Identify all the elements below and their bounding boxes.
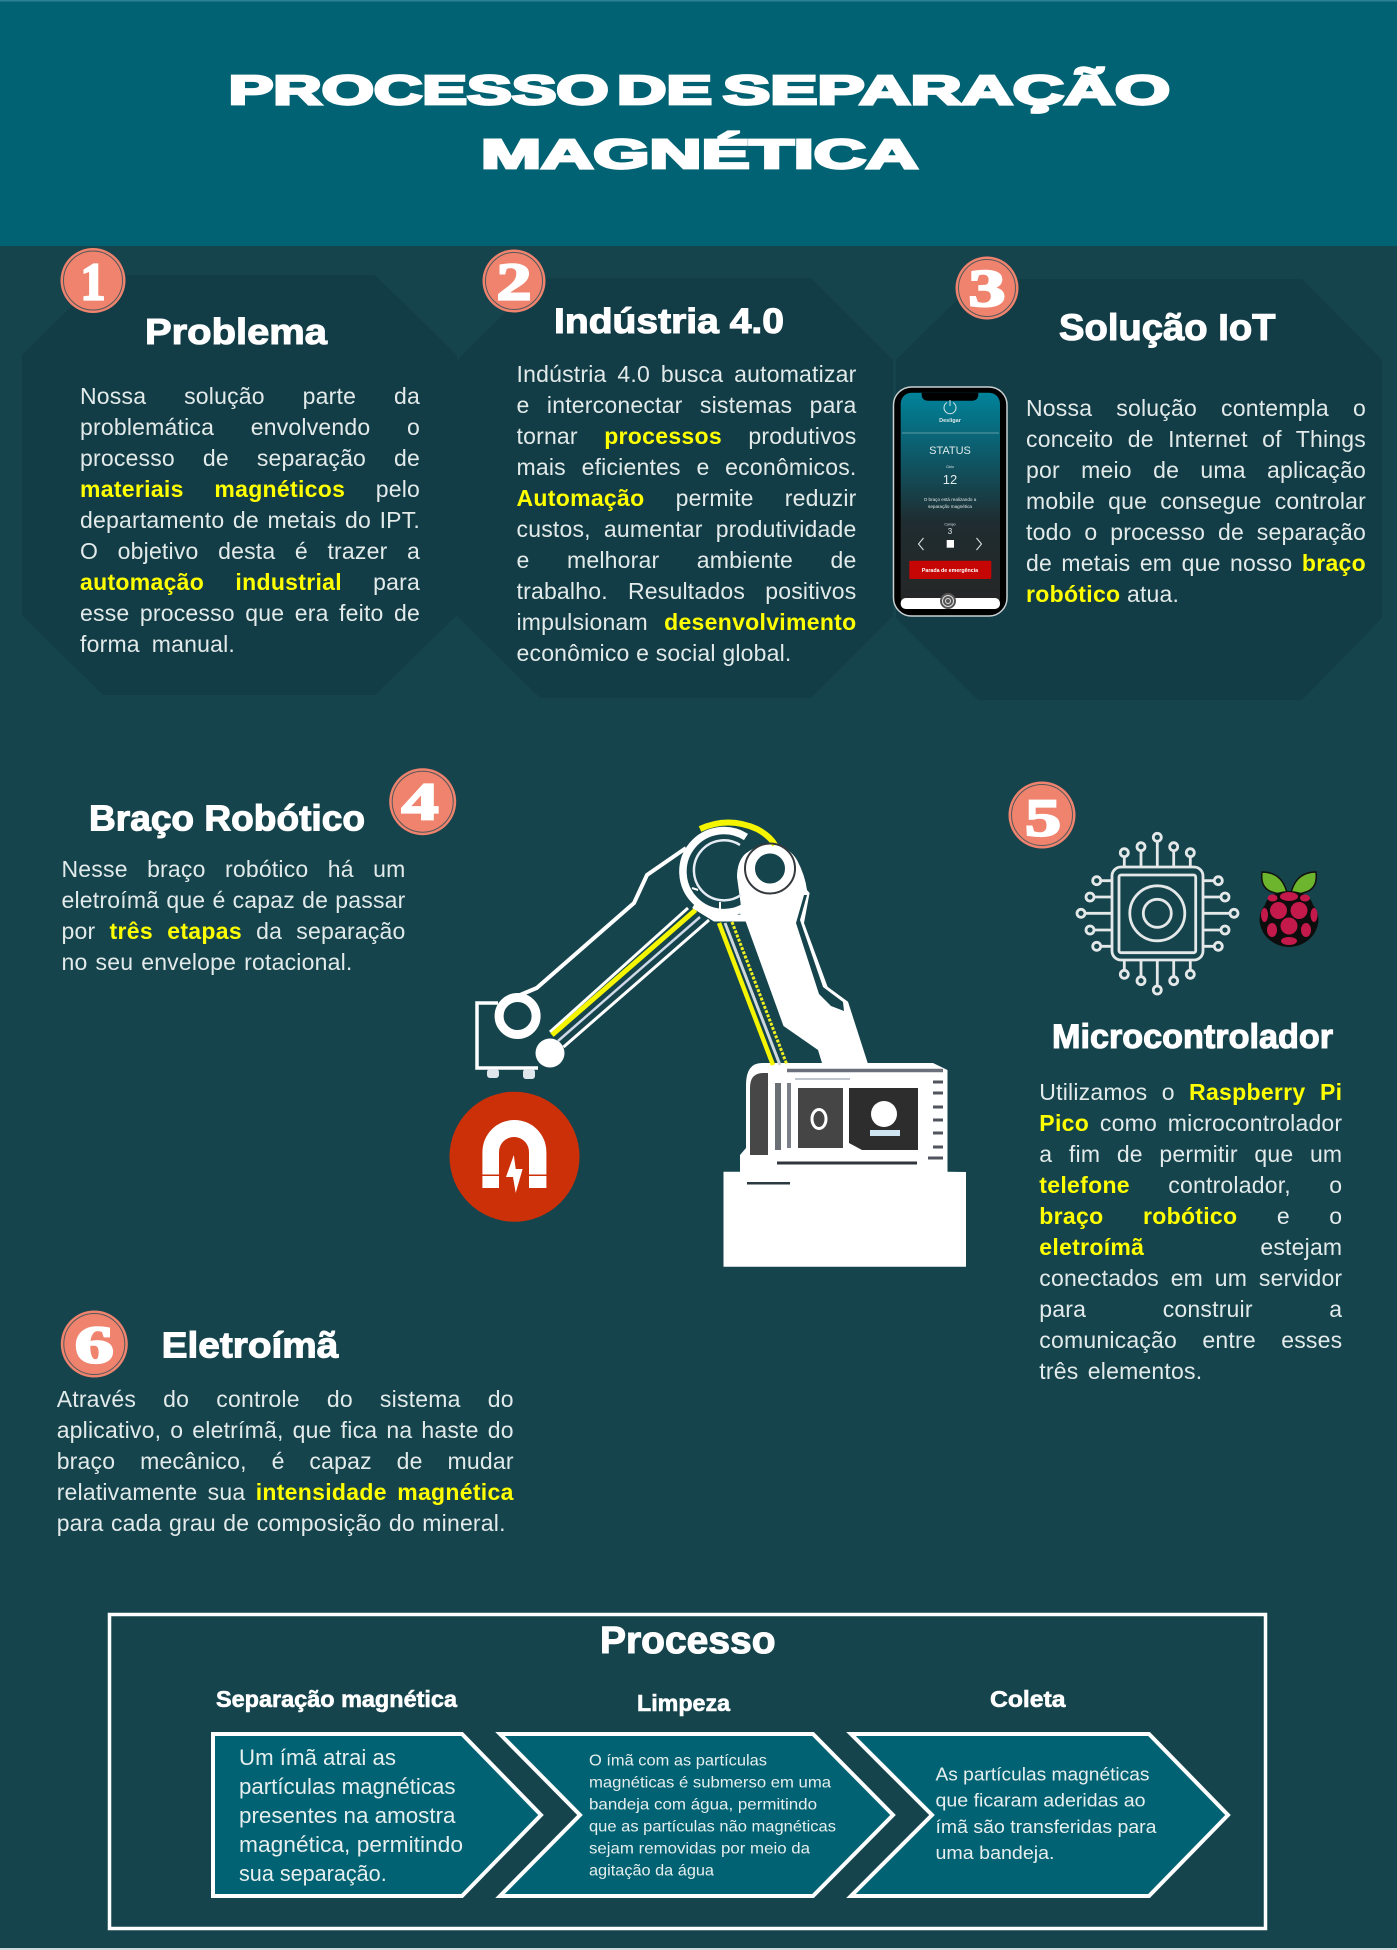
text: braco robotico: eletroímã que é capaz de passar [62, 887, 406, 913]
text: industria 4.0: trabalho. Resultados positivos [516, 578, 856, 604]
chevron step 3 [851, 1734, 1228, 1896]
panel: industria 4.0 [457, 250, 893, 698]
panel: microcontrolador [1008, 782, 1342, 1387]
icon: raspberry pi [1260, 872, 1318, 947]
icon: smartphone app: 3 [948, 527, 953, 536]
text: problema: materiais magnéticos pelo [80, 476, 420, 502]
text: solucao IoT: mobile que consegue controlar [1026, 488, 1366, 514]
chevron step 3: As partículas magnéticas [936, 1764, 1150, 1784]
text: solucao IoT: Nossa solução contempla o [1026, 395, 1366, 421]
text: problema: Nossa solução parte da [80, 383, 420, 409]
badge 6: 6 [75, 1316, 114, 1374]
text: microcontrolador: Pico como microcontrolador [1039, 1110, 1342, 1136]
step heading: coleta: Coleta [990, 1686, 1066, 1712]
chevron step 1: partículas magnéticas [239, 1774, 456, 1799]
panel: eletroima [57, 1310, 514, 1539]
icon: smartphone app: separação magnética [928, 504, 972, 509]
title: MAGNÉTICA [481, 131, 918, 177]
text: industria 4.0: econômico e social global. [516, 640, 792, 666]
badge 3 [956, 256, 1018, 320]
text: microcontrolador: telefone controlador, o [1039, 1172, 1342, 1198]
octagon background 1 [22, 275, 457, 695]
heading: Braco Robotico: Braço Robótico [89, 798, 365, 838]
heading: Eletroima: Eletroímã [162, 1325, 339, 1366]
text: industria 4.0 [516, 358, 856, 668]
robot elbow ring [683, 822, 775, 918]
octagon background 3 [896, 279, 1382, 700]
heading: Industria 4.0: Indústria 4.0 [554, 302, 784, 341]
step heading: limpeza: Limpeza [637, 1690, 730, 1716]
title: SEPARAÇÃO [723, 67, 1170, 113]
badge 2 [482, 250, 546, 312]
badge 4: 4 [402, 774, 438, 832]
robot base block [724, 1172, 966, 1267]
text: microcontrolador: comunicação entre esses [1039, 1327, 1342, 1353]
text: industria 4.0: Automação permite reduzir [516, 484, 856, 510]
text: eletroima: aplicativo, o eletrímã, que fica na haste do [57, 1417, 514, 1443]
chevron step 2 [500, 1734, 893, 1896]
icon: smartphone app: STATUS [929, 445, 971, 457]
panel: braco robotico [62, 768, 456, 978]
chevron step 1: magnética, permitindo [239, 1832, 463, 1857]
text: microcontrolador: para construir a [1039, 1296, 1342, 1322]
badge 4 [389, 768, 456, 835]
robot upper arm outline [520, 848, 686, 995]
text: eletroima: relativamente sua intensidade magnética [57, 1479, 514, 1505]
title: PROCESSO [229, 67, 609, 113]
chevron step 2: agitação da água [589, 1862, 714, 1880]
text: eletroima [57, 1384, 514, 1539]
chevron step 2: que as partículas não magnéticas [589, 1818, 836, 1836]
icon: smartphone app [894, 387, 1007, 616]
text: solucao IoT: conceito de Internet of Things [1026, 426, 1366, 452]
heading: Microcontrolador: Microcontrolador [1052, 1018, 1333, 1056]
heading: Processo: Processo [600, 1620, 776, 1662]
chevron step 2: O ímã com as partículas [589, 1752, 767, 1770]
text: braco robotico [62, 854, 406, 978]
text: braco robotico: por três etapas da separação [62, 918, 406, 944]
icon: microchip [1077, 833, 1238, 994]
text: problema: forma manual. [80, 631, 235, 657]
chevron step 2: sejam removidas por meio da [589, 1840, 810, 1858]
text: problema: esse processo que era feito de [80, 600, 420, 626]
badge 6 [61, 1310, 128, 1378]
badge 2: 2 [496, 254, 532, 312]
heading: Problema: Problema [145, 311, 328, 352]
step heading: separacao magnetica: Separação magnética [216, 1686, 457, 1712]
text: industria 4.0: mais eficientes e econômicos. [516, 454, 856, 480]
badge 5: 5 [1025, 790, 1061, 848]
icon: smartphone app: Desligar [939, 418, 962, 424]
processo frame [110, 1614, 1266, 1928]
chevron step 1: Um ímã atrai as [239, 1745, 396, 1770]
title: DE [617, 67, 712, 113]
title [229, 67, 1170, 177]
text: microcontrolador [1039, 1077, 1342, 1387]
text: solucao IoT: de metais em que nosso braço [1026, 550, 1366, 576]
panel: processo [110, 1614, 1266, 1928]
icon: electromagnet [450, 1092, 580, 1222]
chevron step 3: que ficaram aderidas ao [936, 1790, 1146, 1810]
text: eletroima: braço mecânico, é capaz de mudar [57, 1448, 514, 1474]
chevron step 2: magnéticas é submerso em uma [589, 1774, 831, 1792]
text: solucao IoT: todo o processo de separação [1026, 519, 1366, 545]
text: problema: automação industrial para [80, 569, 420, 595]
text: industria 4.0: Indústria 4.0 busca automatizar [516, 360, 856, 386]
badge 3: 3 [968, 260, 1006, 318]
text: solucao IoT: por meio de uma aplicação [1026, 457, 1366, 483]
panel: problema [22, 248, 457, 695]
text: microcontrolador: a fim de permitir que um [1039, 1141, 1342, 1167]
icon: smartphone app: 12 [943, 472, 957, 487]
text: industria 4.0: tornar processos produtivos [516, 422, 856, 448]
text: problema: departamento de metais do IPT. [80, 507, 420, 533]
text: microcontrolador: três elementos. [1039, 1358, 1202, 1384]
text: problema: processo de separação de [80, 445, 420, 471]
text: industria 4.0: custos, aumentar produtividade [516, 516, 856, 542]
icon: smartphone app: O braço está realizando a [924, 497, 977, 502]
badge 5 [1008, 782, 1076, 848]
text: microcontrolador: braço robótico e o [1039, 1203, 1342, 1229]
badge 1 [60, 248, 126, 313]
icon: smartphone app: Ciclo [946, 465, 954, 469]
text: microcontrolador: conectados em um servidor [1039, 1265, 1342, 1291]
robot forearm [737, 843, 868, 1063]
text: industria 4.0: impulsionam desenvolvimento [516, 608, 856, 634]
chevron step 3: uma bandeja. [936, 1842, 1054, 1863]
chevron step 3: ímã são transferidas para [936, 1816, 1157, 1837]
text: problema: O objetivo desta é trazer a [80, 538, 420, 564]
chevron step 1: presentes na amostra [239, 1803, 456, 1828]
badge 1: 1 [80, 254, 106, 312]
text: microcontrolador: eletroímã estejam [1039, 1234, 1342, 1260]
illustration: robotic arm [477, 822, 966, 1267]
text: eletroima: Através do controle do sistema do [57, 1386, 514, 1412]
text: problema: problemática envolvendo o [80, 414, 420, 440]
text: industria 4.0: e interconectar sistemas para [516, 392, 856, 418]
text: industria 4.0: e melhorar ambiente de [516, 546, 856, 572]
text: braco robotico: no seu envelope rotacional. [62, 949, 352, 975]
icon: smartphone app: Campo [944, 522, 956, 526]
text: problema [80, 381, 420, 660]
chevron step 2: bandeja com água, permitindo [589, 1796, 817, 1814]
octagon background 2 [457, 278, 893, 698]
text: microcontrolador: Utilizamos o Raspberry Pi [1039, 1079, 1342, 1105]
text: solucao IoT: robótico atua. [1026, 581, 1179, 607]
chevron step 1 [213, 1734, 541, 1896]
text: eletroima: para cada grau de composição do mineral. [57, 1510, 506, 1536]
text: braco robotico: Nesse braço robótico há um [62, 856, 406, 882]
header banner [0, 0, 1397, 246]
heading: Solucao IoT: Solução IoT [1059, 307, 1276, 348]
robot control box [740, 1063, 948, 1172]
text: solucao IoT [1026, 393, 1366, 610]
panel: solucao IoT [894, 256, 1382, 700]
icon: smartphone app: Parada de emergência [922, 568, 978, 574]
robot end effector [477, 998, 564, 1079]
robot shoulder joint [745, 844, 795, 894]
chevron step 1: sua separação. [239, 1861, 387, 1886]
robot parallel rods [550, 908, 787, 1065]
